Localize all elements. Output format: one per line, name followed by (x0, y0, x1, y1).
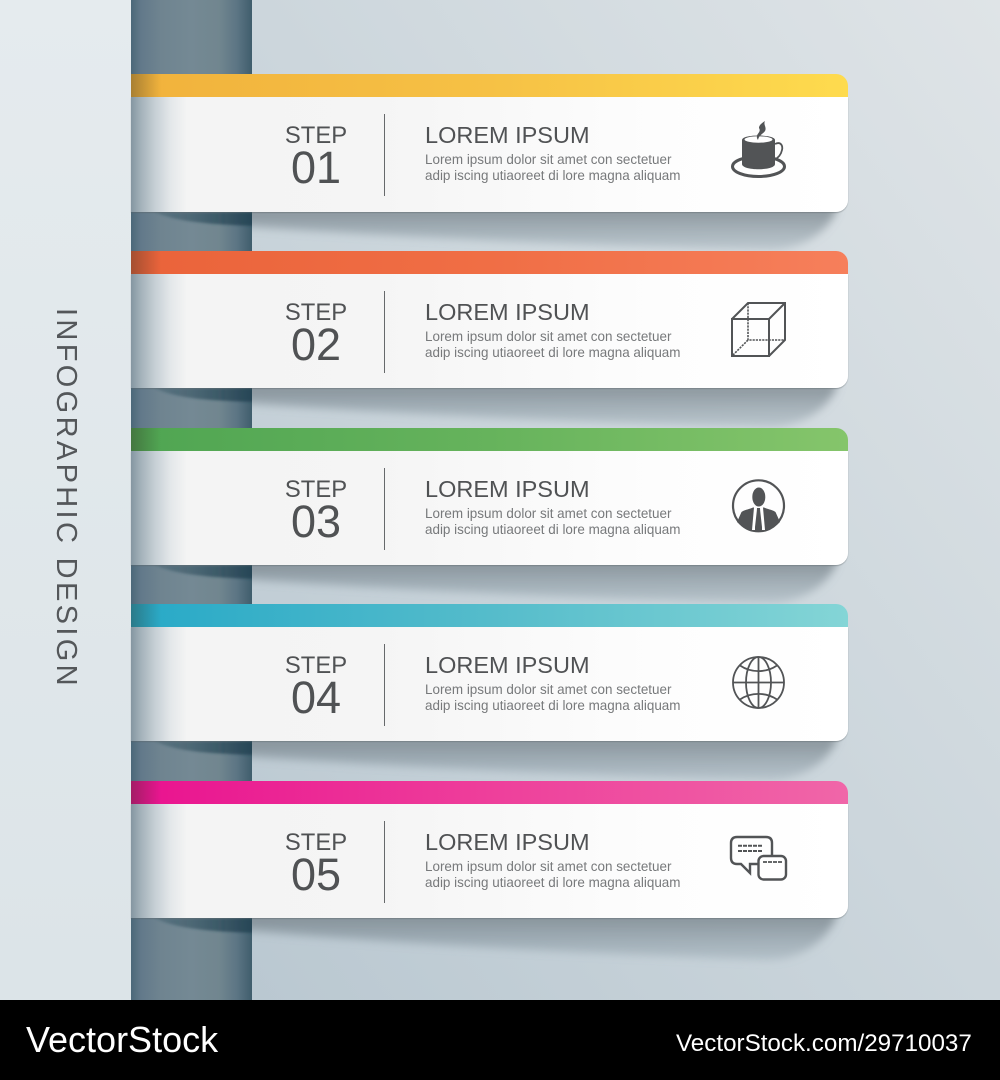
icon: chat bubbles (730, 836, 788, 881)
footer band (0, 1000, 1000, 1080)
description (425, 506, 680, 537)
description: Lorem ipsum dolor sit amet con sectetuer (425, 682, 671, 696)
left background panel (0, 0, 131, 1000)
right background panel (252, 0, 1000, 1000)
card body (131, 627, 848, 741)
description (425, 152, 680, 183)
description: Lorem ipsum dolor sit amet con sectetuer (425, 152, 671, 166)
divider (384, 114, 385, 196)
divider (384, 821, 385, 903)
step label: STEP (285, 652, 347, 679)
description: adip iscing utiaoreet di lore magna aliquam (425, 874, 680, 890)
description: Lorem ipsum dolor sit amet con sectetuer (425, 328, 671, 344)
panel: step 05 (130, 781, 848, 920)
card body (131, 804, 848, 918)
shadow: card 4 (155, 736, 838, 780)
watermark logo: VectorStock (26, 1019, 218, 1060)
panel: step 03 (130, 428, 848, 566)
icon: coffee cup (731, 121, 786, 178)
shadow: card 5 (155, 912, 838, 960)
description (425, 328, 680, 360)
panel: step 02 (130, 251, 848, 390)
description: Lorem ipsum dolor sit amet con sectetuer (425, 858, 671, 874)
heading: LOREM IPSUM (425, 652, 590, 678)
step label: STEP (285, 476, 347, 503)
panel: step 04 (130, 604, 848, 742)
step number: 01 (291, 142, 341, 193)
description (425, 858, 680, 890)
divider (384, 644, 385, 726)
icon: globe (732, 656, 785, 709)
color bar: orange (131, 251, 848, 274)
heading: LOREM IPSUM (425, 122, 590, 148)
card drop shadows (157, 212, 840, 962)
step label: STEP (285, 829, 347, 856)
vertical title: INFOGRAPHIC DESIGN (50, 308, 82, 689)
shadow: card 3 (158, 565, 840, 604)
card body (131, 274, 848, 388)
shadow: card 2 (155, 383, 838, 427)
description: adip iscing utiaoreet di lore magna aliquam (425, 344, 680, 360)
watermark url: VectorStock.com/29710037 (676, 1030, 972, 1056)
divider (384, 291, 385, 373)
description: adip iscing utiaoreet di lore magna aliquam (425, 168, 680, 182)
shadow: card 1 (158, 212, 840, 251)
description: Lorem ipsum dolor sit amet con sectetuer (425, 506, 671, 520)
description: adip iscing utiaoreet di lore magna aliquam (425, 522, 680, 536)
color bar: teal (131, 604, 848, 627)
icon: businessman (732, 479, 786, 532)
card body (131, 97, 848, 212)
step number: 05 (291, 849, 341, 900)
description: adip iscing utiaoreet di lore magna aliquam (425, 698, 680, 712)
card body (131, 451, 848, 565)
color bar: pink (131, 781, 848, 804)
heading: LOREM IPSUM (425, 828, 590, 854)
step label: STEP (285, 299, 347, 326)
step number: 02 (291, 319, 341, 370)
vertical pillar (131, 0, 252, 1000)
step label: STEP (285, 122, 347, 149)
heading: LOREM IPSUM (425, 298, 590, 324)
step number: 04 (291, 672, 341, 723)
color bar: green (131, 428, 848, 451)
heading: LOREM IPSUM (425, 476, 590, 502)
color bar: yellow (131, 74, 848, 97)
panel: step 01 (130, 74, 848, 214)
icon: cube (731, 302, 786, 357)
step number: 03 (291, 496, 341, 547)
description (425, 682, 680, 713)
divider (384, 468, 385, 550)
